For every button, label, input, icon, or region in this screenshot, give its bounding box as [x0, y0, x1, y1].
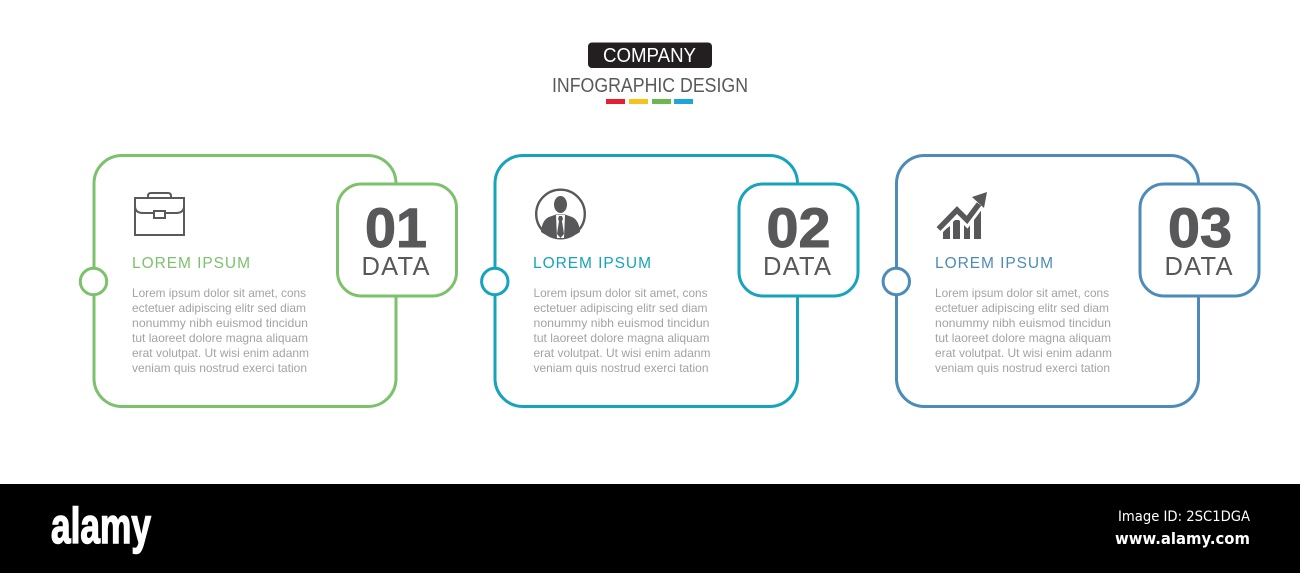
footer bar [0, 484, 1300, 573]
colour key bars [606, 99, 693, 104]
alamy logo: alamy [51, 498, 151, 554]
panel outline [896, 156, 1198, 406]
icon: businessman [536, 190, 585, 238]
body text: Lorem ipsum dolor sit amet, cons [132, 286, 306, 300]
heading: LOREM IPSUM [935, 255, 1053, 272]
body text: tut laoreet dolore magna aliquam [132, 331, 308, 345]
icon: briefcase [135, 193, 184, 235]
connector circle [482, 268, 508, 295]
number badge: 02 [766, 196, 830, 259]
body text: erat volutpat. Ut wisi enim adanm [132, 346, 309, 360]
body text: nonummy nibh euismod tincidun [534, 316, 710, 330]
number badge [338, 184, 456, 296]
body text: ectetuer adipiscing elitr sed diam [534, 301, 708, 315]
body text: Lorem ipsum dolor sit amet, cons [534, 286, 708, 300]
panel: 02 [482, 156, 858, 406]
body text: tut laoreet dolore magna aliquam [534, 331, 710, 345]
body text [935, 286, 1112, 375]
image id: Image ID: 2SC1DGA [1118, 509, 1250, 525]
number badge [739, 184, 858, 296]
body text: nonummy nibh euismod tincidun [132, 316, 308, 330]
body text [534, 286, 710, 375]
body text: veniam quis nostrud exerci tation [935, 361, 1110, 375]
website: www.alamy.com [1115, 529, 1250, 548]
heading: LOREM IPSUM [533, 255, 651, 272]
body text: nonummy nibh euismod tincidun [935, 316, 1111, 330]
title: INFOGRAPHIC DESIGN [552, 74, 748, 97]
body text: Lorem ipsum dolor sit amet, cons [935, 286, 1109, 300]
panel outline [495, 156, 798, 406]
header [552, 42, 748, 104]
body text: ectetuer adipiscing elitr sed diam [935, 301, 1109, 315]
body text [132, 286, 309, 375]
number badge: DATA [763, 253, 831, 281]
body text: erat volutpat. Ut wisi enim adanm [534, 346, 710, 360]
icon: rising chart [938, 192, 987, 239]
company pill: COMPANY [603, 45, 696, 67]
panel outline [94, 156, 396, 406]
number badge: 01 [365, 196, 427, 259]
body text: ectetuer adipiscing elitr sed diam [132, 301, 306, 315]
connector circle [80, 268, 107, 295]
panel: 01 [80, 156, 457, 406]
body text: tut laoreet dolore magna aliquam [935, 331, 1111, 345]
number badge: 03 [1168, 196, 1232, 259]
body text: veniam quis nostrud exerci tation [534, 361, 708, 375]
heading: LOREM IPSUM [132, 255, 250, 272]
number badge: DATA [1164, 253, 1232, 281]
body text: erat volutpat. Ut wisi enim adanm [935, 346, 1112, 360]
connector circle [883, 268, 910, 295]
number badge: DATA [362, 253, 430, 281]
number badge [1140, 184, 1259, 296]
panel: 03 [883, 156, 1259, 406]
company pill [588, 42, 712, 68]
body text: veniam quis nostrud exerci tation [132, 361, 307, 375]
